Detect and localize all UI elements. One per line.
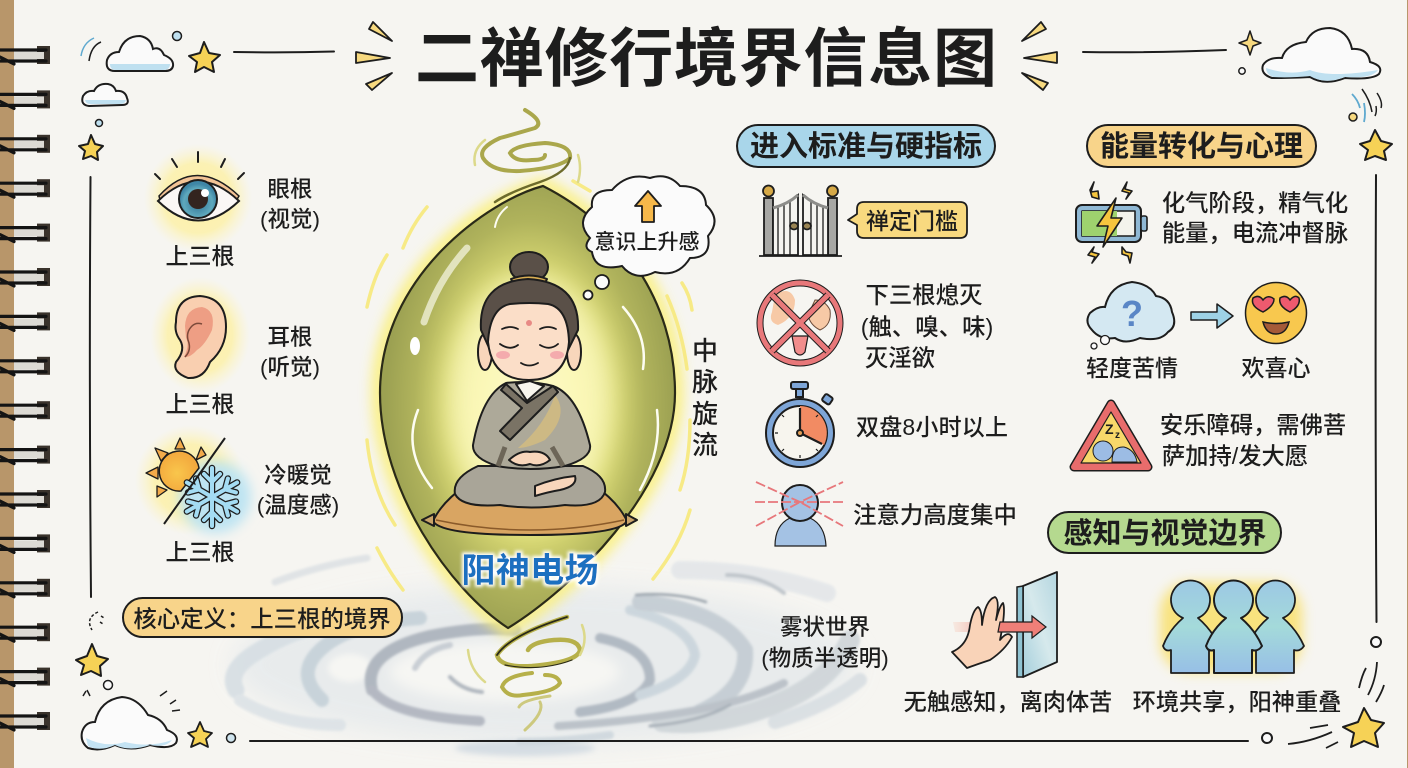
icon: eye — [144, 144, 252, 252]
core definition pill: 核心定义：上三根的境界 — [133, 606, 391, 632]
text: energy: 化气阶段，精气化 — [1162, 190, 1348, 216]
item: double lotus eight hours — [766, 382, 1008, 467]
icon: question cloud: ? — [1121, 293, 1143, 334]
heading: energy and psychology — [1087, 125, 1316, 167]
icon: sleep warning — [1074, 404, 1148, 467]
ears — [478, 334, 492, 370]
heading: energy and psychology: 能量转化与心理 — [1100, 130, 1303, 163]
heading: entry standards: 进入标准与硬指标 — [750, 130, 982, 163]
title: 二禅修行境界信息图 — [415, 23, 997, 95]
icon: ear — [150, 277, 250, 393]
halo — [380, 186, 675, 628]
label: central channel swirl — [692, 336, 718, 460]
callout: threshold — [848, 202, 967, 238]
item: meditation threshold gate — [759, 186, 967, 256]
label: ear root: 耳根 — [267, 325, 313, 350]
label: mist world — [761, 615, 889, 671]
text: lower roots: (触、嗅、味) — [861, 314, 993, 340]
icon: hand through glass — [952, 572, 1057, 677]
heading: entry standards — [737, 125, 995, 167]
text: no-touch perception: 无触感知，离肉体苦 — [904, 689, 1112, 715]
label: ear root — [260, 325, 320, 380]
thought cloud: consciousness rising: 意识上升感 — [594, 231, 700, 254]
text: focused attention: 注意力高度集中 — [853, 502, 1017, 528]
icon: heart-eyes emoji — [1246, 282, 1306, 344]
monk figure — [422, 252, 637, 535]
label: upper root 1: 上三根 — [166, 243, 234, 269]
label: upper root 2: 上三根 — [166, 391, 234, 417]
text: shared environment: 环境共享，阳神重叠 — [1133, 689, 1341, 715]
item: focused attention — [755, 482, 1017, 546]
labels: suffering and joy: 欢喜心 — [1242, 355, 1310, 381]
text: lower roots: 灭淫欲 — [865, 345, 935, 371]
icon: sun and snowflake — [135, 425, 251, 535]
icon: overlapping figures — [1160, 580, 1304, 673]
inner glow — [448, 275, 612, 525]
panel: yang spirit electric field — [367, 110, 692, 730]
item: mild suffering to joy — [1086, 282, 1310, 381]
label: mist world: 雾状世界 — [780, 615, 870, 640]
heading: perception and vision boundary — [1048, 512, 1281, 553]
icon: sleep warning: z — [1115, 430, 1120, 441]
spiral binding — [0, 46, 50, 730]
cushion — [422, 486, 637, 535]
icon: prohibited senses — [760, 283, 840, 363]
text: energy — [1162, 190, 1348, 246]
text: bliss obstacle: 安乐障碍，需佛菩 — [1160, 412, 1346, 438]
mist strokes — [233, 558, 860, 742]
label: upper root 3: 上三根 — [166, 539, 234, 565]
text: bliss obstacle: 萨加持/发大愿 — [1162, 443, 1308, 469]
label: eye root: (视觉) — [260, 207, 320, 232]
item: shared environment — [1133, 580, 1341, 715]
icon: question cloud — [1087, 282, 1174, 349]
icon: focused person — [755, 482, 845, 546]
label: central channel swirl: 中 — [692, 336, 718, 366]
decorations: top right clouds and stars — [1239, 28, 1392, 160]
label: cold warm sense — [257, 463, 339, 518]
mist swirl — [233, 558, 860, 756]
item: no-touch perception — [904, 572, 1112, 715]
robe — [473, 382, 590, 469]
icon: sleep warning: Z — [1105, 421, 1114, 437]
egg highlights — [410, 207, 658, 490]
hair and face — [481, 279, 578, 350]
callout: threshold: 禅定门槛 — [866, 208, 958, 234]
text: energy: 能量，电流冲督脉 — [1162, 220, 1348, 246]
icon: battery — [1076, 182, 1147, 263]
wisp bottom — [468, 617, 585, 730]
label: central channel swirl: 流 — [692, 430, 718, 460]
text: lower roots — [861, 282, 993, 371]
text: lower roots: 下三根熄灭 — [866, 282, 982, 308]
item: lower three roots extinguished — [760, 282, 993, 371]
label: cold warm sense: (温度感) — [257, 493, 339, 518]
icon: gate — [759, 186, 842, 256]
panel: upper three roots — [135, 144, 339, 565]
decorations: bottom right — [1262, 637, 1384, 748]
field label: 阳神电场 — [462, 552, 598, 590]
item: bliss obstacle — [1074, 404, 1346, 469]
core definition pill — [123, 598, 402, 637]
label: central channel swirl: 旋 — [692, 399, 718, 429]
text: double lotus: 双盘8小时以上 — [856, 414, 1008, 440]
label: central channel swirl: 脉 — [692, 367, 718, 397]
wisp top — [474, 110, 580, 202]
thought cloud: consciousness rising — [583, 176, 715, 300]
title sparks — [356, 22, 1057, 90]
decorations: top left clouds and stars — [79, 32, 220, 160]
decorations: bottom left — [76, 612, 236, 749]
label: ear root: (听觉) — [260, 355, 320, 380]
labels: suffering and joy: 轻度苦情 — [1086, 355, 1178, 381]
label: eye root: 眼根 — [267, 177, 313, 202]
icon: stopwatch — [766, 382, 834, 467]
labels: suffering and joy — [1086, 355, 1310, 381]
label: mist world: (物质半透明) — [761, 646, 889, 671]
label: eye root — [260, 177, 320, 232]
egg body — [380, 186, 675, 628]
arrow — [1191, 304, 1233, 328]
item: energy transformation — [1076, 182, 1348, 263]
mist wash — [233, 585, 857, 745]
label: cold warm sense: 冷暖觉 — [264, 463, 332, 488]
legs — [455, 466, 605, 508]
bun — [510, 252, 548, 282]
text: bliss obstacle — [1160, 412, 1346, 469]
heading: perception and vision boundary: 感知与视觉边界 — [1063, 517, 1267, 550]
